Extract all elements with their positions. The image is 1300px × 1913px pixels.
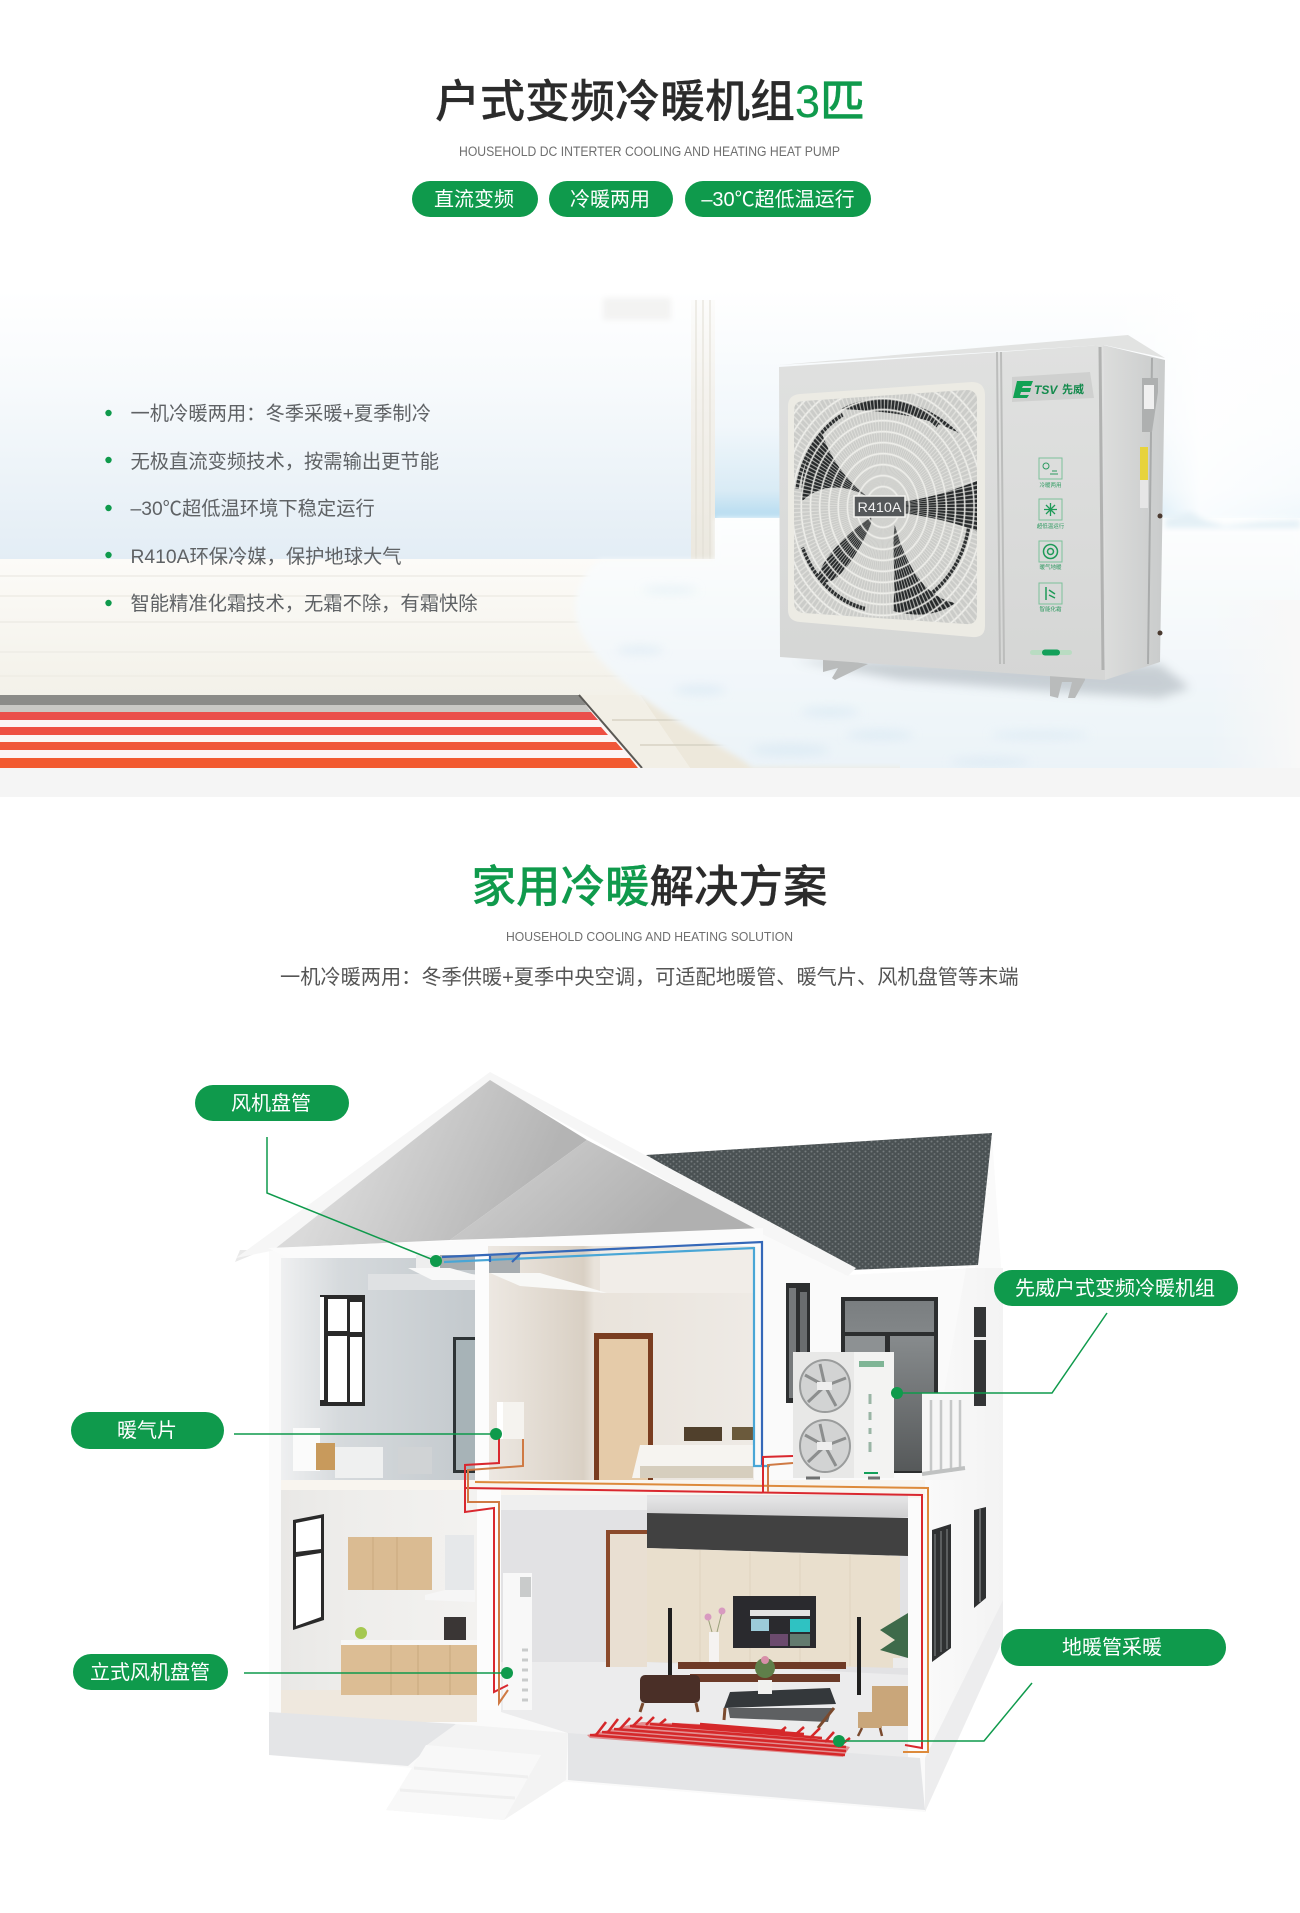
gable and attic <box>236 1072 856 1276</box>
wall and side windows <box>908 1498 986 1758</box>
feature wall <box>647 1513 908 1668</box>
label: 暖气片 <box>117 1419 177 1442</box>
panel: product hero <box>0 290 1300 797</box>
coffee table <box>724 1688 836 1728</box>
callout: ceiling fan coil <box>195 1085 442 1267</box>
icon: low temperature <box>1037 499 1065 530</box>
kitchen <box>281 1490 477 1722</box>
subtitle: HOUSEHOLD DC INTERTER COOLING AND HEATING HEAT PUMP <box>459 144 840 159</box>
label: 先威户式变频冷暖机组 <box>1015 1277 1215 1300</box>
callout: floor fan coil <box>73 1654 513 1690</box>
icon: spiral: 暖气地暖 <box>1039 563 1062 571</box>
ceiling beam <box>268 1228 763 1262</box>
label: 立式风机盘管 <box>90 1661 210 1684</box>
callout: radiator <box>71 1412 502 1449</box>
tag: DC inverter <box>412 181 538 217</box>
tag: cooling and heating: 冷暖两用 <box>570 188 650 211</box>
armchair <box>858 1686 908 1736</box>
floor heating coil <box>587 1717 850 1757</box>
tag: DC inverter: 直流变频 <box>434 188 514 211</box>
ceiling fan coil units <box>408 1255 607 1293</box>
range hood <box>425 1535 475 1602</box>
band under hero <box>0 768 1300 797</box>
brand logo: 先威 <box>1062 382 1084 396</box>
bullet 4: R410A环保冷媒，保护地球大气 <box>130 546 402 568</box>
balcony windows <box>786 1283 986 1473</box>
section subtitle: HOUSEHOLD COOLING AND HEATING SOLUTION <box>506 929 793 944</box>
bullet 2: 无极直流变频技术，按需输出更节能 <box>130 451 439 473</box>
door <box>606 1530 647 1667</box>
speakers <box>668 1608 861 1695</box>
door <box>594 1333 653 1482</box>
label: 风机盘管 <box>231 1092 311 1115</box>
leader line <box>891 1313 1107 1399</box>
radiator <box>497 1402 524 1439</box>
refrigerant label <box>854 496 905 517</box>
icon: defrost: 智能化霜 <box>1039 605 1062 613</box>
refrigerant label: R410A <box>858 499 902 515</box>
feature list <box>105 403 478 615</box>
dark tiled roof <box>646 1133 992 1270</box>
icon: low temperature: 超低温运行 <box>1037 522 1065 530</box>
icon: spiral <box>1039 541 1062 571</box>
knife block and counter <box>341 1617 477 1649</box>
feature tags <box>412 181 871 217</box>
floor standing fan coil <box>503 1573 532 1710</box>
flowers <box>755 1656 775 1694</box>
floor heating pipes <box>0 695 642 768</box>
lower column <box>477 1490 501 1710</box>
balcony railing <box>922 1393 965 1480</box>
floor slab <box>281 1480 925 1498</box>
two-fan outdoor unit <box>793 1352 894 1478</box>
section description: 一机冷暖两用：冬季供暖+夏季中央空调，可适配地暖管、暖气片、风机盘管等末端 <box>280 966 1019 989</box>
label <box>71 1412 224 1449</box>
house illustration <box>71 1072 1238 1820</box>
fan grille <box>788 382 985 637</box>
feet <box>823 660 1085 698</box>
callout: floor heating <box>833 1629 1226 1747</box>
vase <box>704 1608 726 1663</box>
label <box>994 1270 1238 1306</box>
tag: cooling and heating <box>549 181 673 217</box>
upstairs bedroom <box>488 1246 754 1482</box>
exterior walls <box>235 1135 1003 1812</box>
bullet 1: 一机冷暖两用：冬季采暖+夏季制冷 <box>130 403 431 425</box>
icon: cooling and heating: 冷暖两用 <box>1039 481 1062 489</box>
plant <box>880 1613 908 1668</box>
pipes: cold water <box>442 1242 770 1467</box>
label <box>1001 1629 1226 1666</box>
icon: defrost <box>1039 583 1062 613</box>
section title: 家用冷暖解决方案 <box>471 863 828 912</box>
base cabinets <box>341 1645 477 1695</box>
central column <box>475 1254 489 1482</box>
bullet 3: –30℃超低温环境下稳定运行 <box>130 498 375 520</box>
bullet 5: 智能精准化霜技术，无霜不除，有霜快除 <box>130 593 478 615</box>
brand logo <box>1012 372 1094 402</box>
wall cabinets <box>348 1537 432 1590</box>
bed <box>632 1427 753 1478</box>
window <box>293 1514 324 1630</box>
television <box>733 1596 816 1648</box>
tv console <box>678 1662 846 1682</box>
snow flecks <box>616 587 1090 766</box>
ground shadow <box>795 660 1190 698</box>
bathroom fixtures <box>293 1428 432 1478</box>
label: 地暖管采暖 <box>1062 1636 1162 1659</box>
title: 户式变频冷暖机组3匹 <box>435 76 865 127</box>
window <box>320 1295 365 1406</box>
callout: outdoor unit <box>891 1270 1238 1399</box>
status indicator <box>1030 650 1072 656</box>
tag: low temperature: –30℃超低温运行 <box>701 188 855 211</box>
glass door <box>453 1337 475 1473</box>
feature icons <box>1037 458 1065 613</box>
unit body <box>779 335 1165 680</box>
product: outdoor unit <box>757 335 1190 698</box>
living room <box>501 1495 908 1758</box>
label <box>195 1085 349 1121</box>
leader line <box>267 1137 442 1267</box>
entrance stairs <box>386 1724 568 1820</box>
base and foundation <box>269 1712 925 1810</box>
ottoman <box>640 1675 700 1712</box>
leader line <box>234 1428 502 1440</box>
icon: cooling and heating <box>1039 458 1062 489</box>
leader line <box>833 1683 1032 1747</box>
background scene <box>0 290 1300 768</box>
label <box>73 1654 228 1690</box>
upstairs bathroom <box>281 1258 475 1480</box>
leader line <box>244 1667 513 1679</box>
tag: low temperature <box>685 181 871 217</box>
pipes: warm water <box>465 1438 928 1752</box>
brand logo: TSV <box>1034 383 1058 397</box>
